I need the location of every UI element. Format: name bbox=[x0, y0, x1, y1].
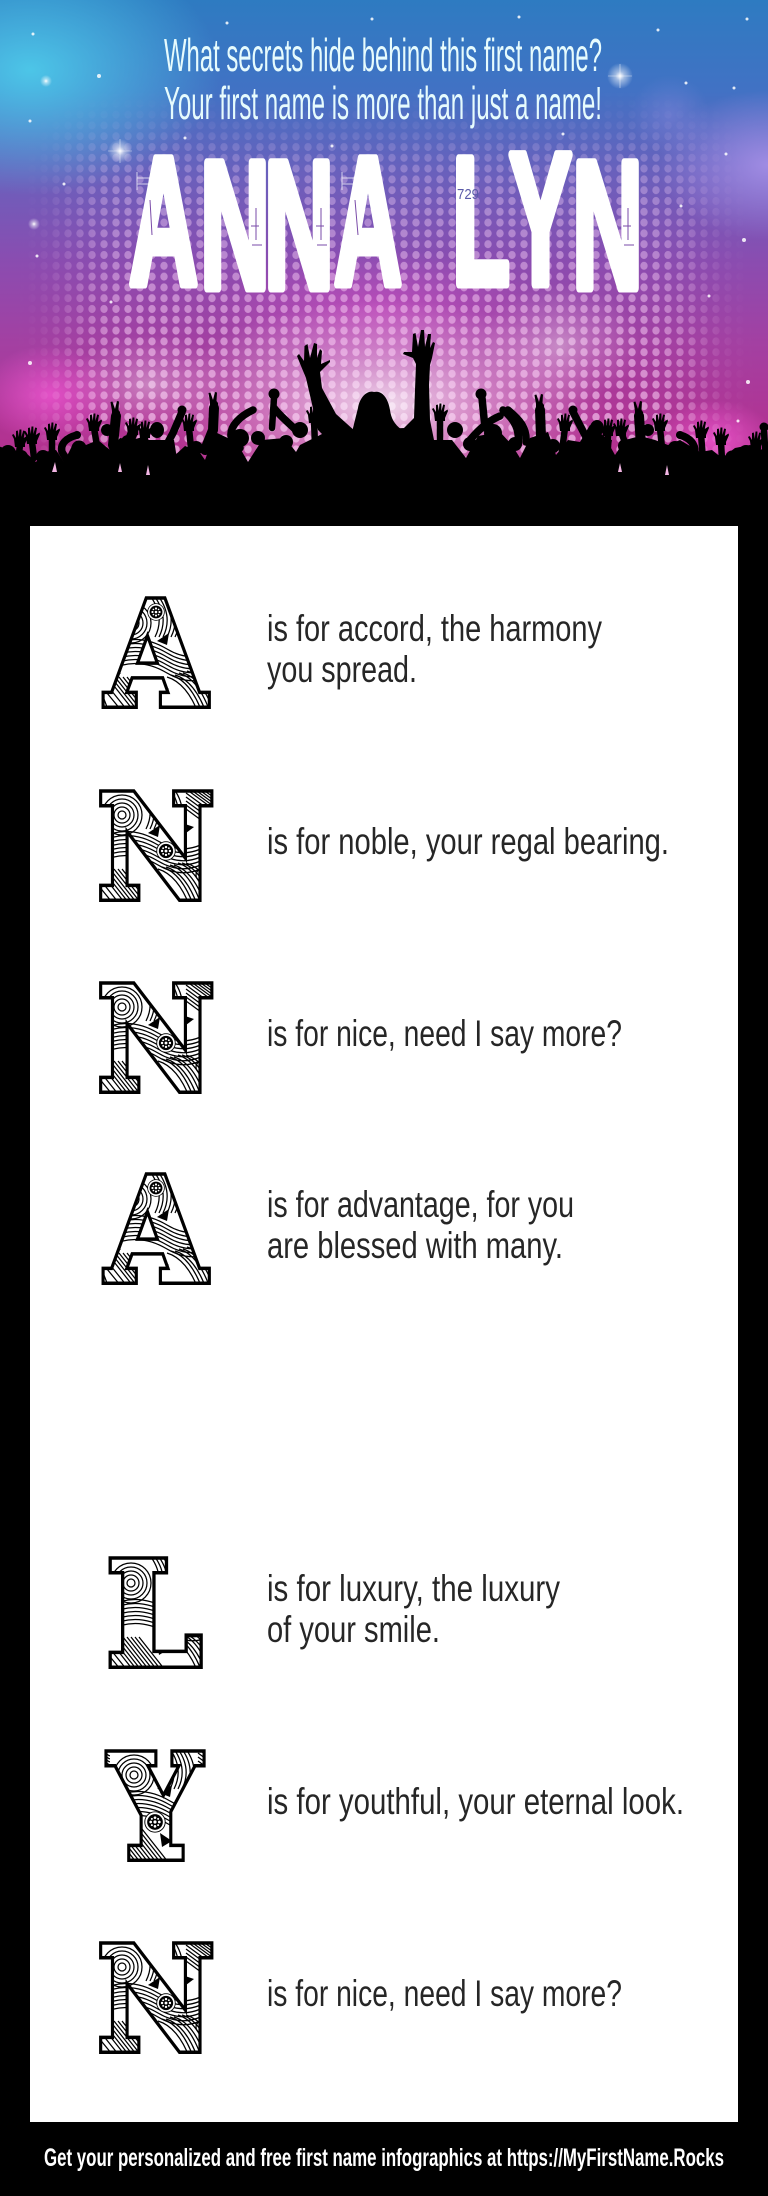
icon: patterned letter Y: Y bbox=[108, 1726, 201, 1891]
name title: N bbox=[572, 123, 643, 327]
name title: N bbox=[264, 123, 334, 327]
text: luxury: of your smile. bbox=[267, 1609, 440, 1650]
crowd silhouette bbox=[0, 330, 768, 528]
row N nice bbox=[98, 958, 622, 1123]
text: luxury: is for luxury, the luxury bbox=[267, 1568, 560, 1609]
icon: patterned letter L: L bbox=[107, 1533, 201, 1698]
row L luxury bbox=[107, 1533, 560, 1698]
text: noble: is for noble, your regal bearing. bbox=[267, 821, 669, 862]
icon: patterned letter A: A bbox=[105, 1149, 206, 1314]
icon: patterned letter N: N bbox=[98, 766, 214, 931]
icon: patterned letter N: N bbox=[98, 1918, 214, 2083]
name title: A bbox=[129, 119, 198, 323]
icon: patterned letter Y: Y bbox=[108, 1726, 201, 1891]
icon: patterned letter A: A bbox=[105, 573, 206, 738]
icon: patterned letter N: N bbox=[98, 1918, 214, 2083]
name title: Y bbox=[509, 114, 572, 324]
name title bbox=[129, 114, 643, 327]
icon: patterned letter L: L bbox=[107, 1533, 201, 1698]
name title: N bbox=[200, 123, 270, 327]
text: nice: is for nice, need I say more? bbox=[267, 1973, 622, 2014]
row N nice repeat bbox=[98, 1918, 622, 2083]
name title: L bbox=[452, 119, 510, 323]
icon: patterned letter N: N bbox=[98, 958, 214, 1123]
text: accord: is for accord, the harmony bbox=[267, 608, 602, 649]
text: advantage: are blessed with many. bbox=[267, 1225, 563, 1266]
icon: patterned letter N: N bbox=[98, 958, 214, 1123]
row A advantage bbox=[105, 1149, 574, 1314]
text: accord: you spread. bbox=[267, 649, 417, 690]
white content panel bbox=[30, 526, 738, 2122]
text: nice: is for nice, need I say more? bbox=[267, 1013, 622, 1054]
header concert background bbox=[0, 0, 768, 462]
sparkles bbox=[28, 16, 750, 422]
text: advantage: is for advantage, for you bbox=[267, 1184, 574, 1225]
row A accord bbox=[105, 573, 602, 738]
icon: patterned letter A: A bbox=[105, 1149, 206, 1314]
intro heading bbox=[164, 29, 602, 129]
row Y youthful bbox=[108, 1726, 684, 1891]
name title: A bbox=[334, 119, 402, 323]
icon: patterned letter A: A bbox=[105, 573, 206, 738]
row N noble bbox=[98, 766, 669, 931]
name title: 729 bbox=[457, 186, 479, 203]
icon: patterned letter N: N bbox=[98, 766, 214, 931]
